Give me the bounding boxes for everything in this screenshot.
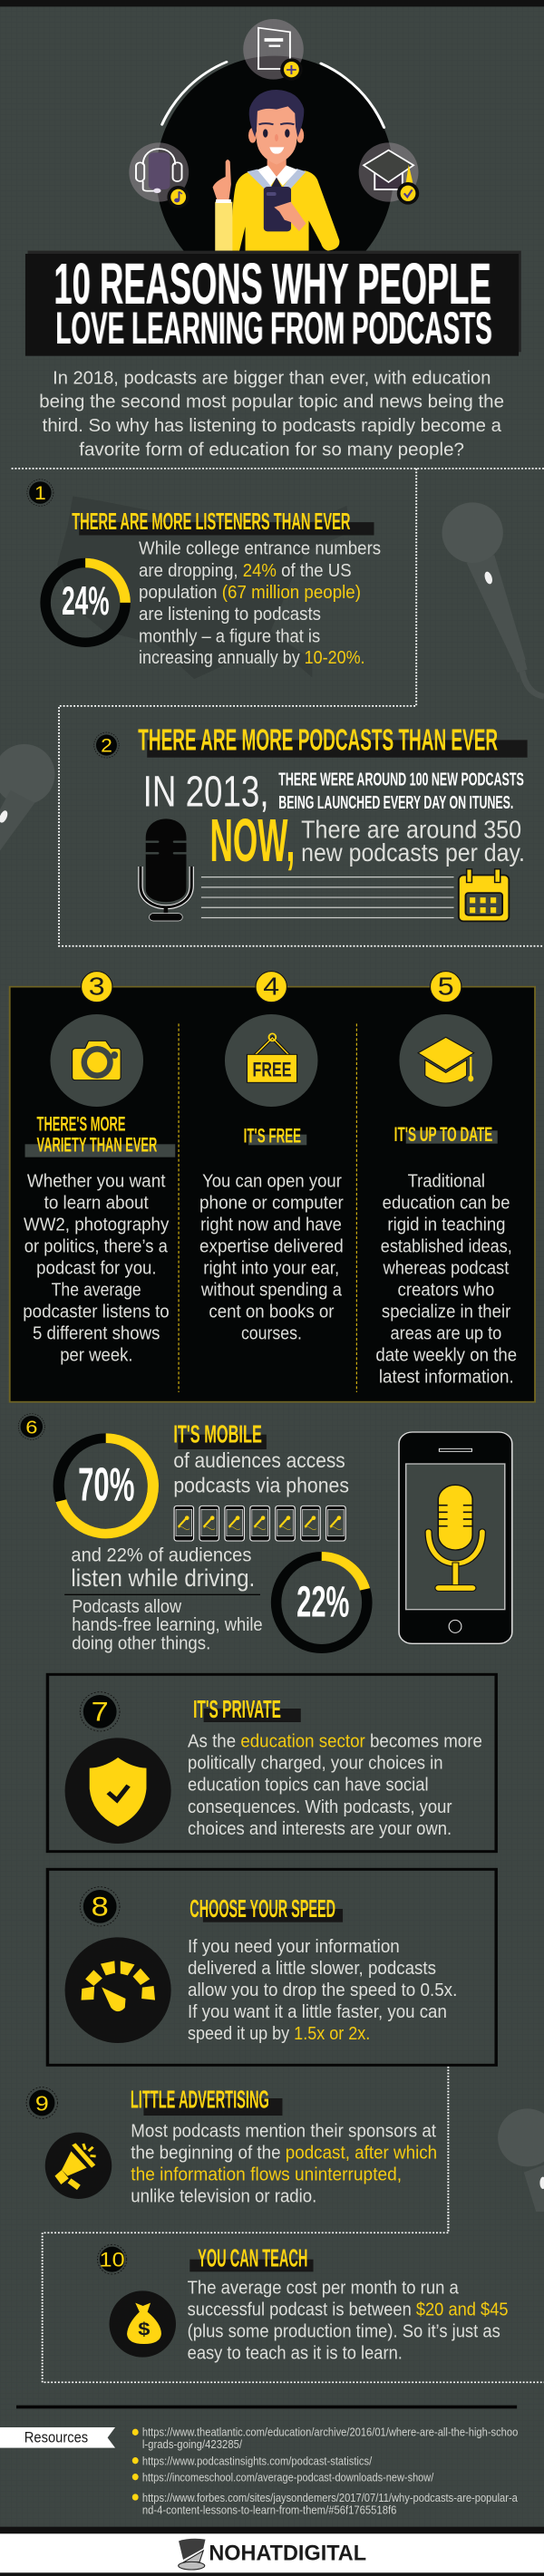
icon: money bag: $ (138, 2319, 151, 2339)
header section (0, 0, 544, 460)
column 5 (375, 972, 517, 1387)
text: driving stat: doing other things. (72, 1633, 210, 1653)
heading (72, 508, 374, 536)
panel: reason 8 (47, 1869, 496, 2065)
number 7: 7 (92, 1697, 109, 1727)
heading (193, 1696, 301, 1723)
number 6: 6 (25, 1417, 37, 1438)
body text: While college entrance numbers (139, 538, 381, 558)
icon: document (243, 19, 304, 81)
number 1 (27, 479, 53, 506)
intro text: favorite form of education for so many people? (79, 439, 464, 460)
body text: monthly – a figure that is (139, 626, 320, 646)
heading (173, 1421, 267, 1449)
body text: areas are up to (390, 1322, 501, 1343)
lines (201, 877, 454, 918)
body text: the beginning of the podcast, after which (131, 2142, 437, 2163)
hero illustration (129, 19, 419, 294)
body text: allow you to drop the speed to 0.5x. (188, 1979, 457, 2000)
icons: row of phones (174, 1506, 345, 1541)
number 3 (82, 972, 112, 1002)
body text: podcast for you. (36, 1257, 157, 1278)
text: driving stat: and 22% of audiences (71, 1544, 251, 1565)
body text: cent on books or (209, 1301, 335, 1322)
icon: free sign (225, 1014, 318, 1107)
body text: or politics, there’s a (24, 1235, 168, 1256)
title banner (25, 250, 521, 356)
donut chart 70% (59, 1438, 153, 1534)
intro text (39, 367, 504, 460)
stat now (210, 807, 525, 874)
text: phones stat (173, 1449, 349, 1497)
text: driving stat: Podcasts allow (72, 1596, 182, 1617)
body text: The average cost per month to run a (188, 2277, 459, 2298)
heading (131, 2087, 282, 2116)
resources ribbon (0, 2427, 115, 2448)
panel: reason 8: CHOOSE YOUR SPEED (189, 1895, 335, 1923)
body text: speed it up by 1.5x or 2x. (188, 2022, 370, 2044)
body text: expertise delivered (199, 1235, 344, 1256)
panel: reason 6 (18, 1414, 512, 1653)
resources list: https://www.podcastinsights.com/podcast-statistics/ (142, 2455, 372, 2467)
text: driving stat (64, 1544, 263, 1653)
panel: reason 2 (94, 723, 528, 921)
text: phones stat: podcasts via phones (173, 1475, 349, 1497)
body text (188, 2277, 509, 2363)
heading: IT'S FREE (244, 1126, 301, 1148)
body text (199, 1170, 344, 1343)
person (213, 90, 339, 251)
stat 2013: IN 2013, (143, 766, 269, 816)
body text: right into your ear, (203, 1257, 339, 1278)
heading (189, 2245, 314, 2272)
body text: easy to teach as it is to learn. (188, 2342, 403, 2363)
body text: the information flows uninterrupted, (131, 2164, 402, 2184)
phone mic (429, 1485, 482, 1591)
stat 2013 (143, 766, 524, 816)
body text (188, 1935, 457, 2044)
body text: choices and interests are your own. (188, 1817, 452, 1839)
white arcs (162, 62, 384, 128)
dotted path (12, 469, 544, 946)
icon: graduation cap (359, 142, 419, 205)
black circle (156, 56, 393, 294)
column dividers (179, 1023, 356, 1392)
body text: WW2, photography (24, 1214, 170, 1235)
body text: unlike television or radio. (131, 2185, 316, 2206)
number 1: 1 (34, 482, 46, 504)
resources ribbon: Resources (24, 2428, 88, 2445)
donut chart 22% (277, 1556, 367, 1649)
footer (0, 2527, 544, 2576)
panel: reasons 3 to 5 (10, 972, 535, 1402)
body text (139, 538, 381, 668)
body text (188, 1730, 482, 1839)
top bar (0, 0, 544, 6)
text: phones stat: of audiences access (173, 1449, 345, 1473)
body text: 5 different shows (33, 1322, 160, 1343)
icon: microphone (141, 818, 191, 921)
body text: You can open your (202, 1170, 342, 1191)
heading (189, 1895, 343, 1923)
resources list: nd-4-content-lessons-to-learn-from-them/#56f1765518f6 (142, 2503, 396, 2516)
number 7 (80, 1692, 120, 1731)
heading: THERE'S MORE (37, 1114, 126, 1136)
donut chart 24%: 24% (62, 577, 110, 624)
body text: right now and have (200, 1214, 342, 1235)
lower section (0, 2212, 544, 2576)
number 2: 2 (101, 735, 112, 757)
number 10: 10 (100, 2250, 125, 2271)
heading: IT'S PRIVATE (193, 1696, 281, 1723)
heading: IT'S MOBILE (173, 1421, 262, 1448)
icon: speedometer (65, 1937, 171, 2043)
resources list: https://incomeschool.com/average-podcast-downloads-new-show/ (142, 2472, 433, 2484)
sections 1 and 2 (0, 469, 544, 946)
body text: per week. (60, 1344, 133, 1365)
donut chart 70%: 70% (78, 1457, 134, 1511)
number 4: 4 (263, 973, 279, 1001)
heading (25, 1114, 175, 1157)
body text: rigid in teaching (387, 1214, 506, 1235)
number 4 (256, 972, 287, 1002)
body text: The average (52, 1279, 141, 1300)
resources list (132, 2426, 518, 2516)
number 9 (26, 2087, 58, 2118)
icon: mortarboard (399, 1014, 492, 1107)
body text: podcaster listens to (23, 1301, 170, 1322)
panel background (10, 987, 535, 1402)
logo: hat (179, 2539, 206, 2570)
body text: As the education sector becomes more (188, 1730, 482, 1751)
body text (375, 1170, 517, 1387)
panel: reason 9 (26, 2087, 437, 2206)
icon: free sign: FREE (253, 1060, 291, 1081)
panel: reason 10: YOU CAN TEACH (198, 2245, 307, 2272)
dotted path (446, 2067, 451, 2232)
body text: creators who (398, 1279, 494, 1300)
stat now: NOW, (210, 807, 295, 874)
US map silhouette (57, 496, 349, 679)
icon: camera (50, 1014, 143, 1107)
body text (131, 2120, 437, 2206)
body text: courses. (241, 1322, 302, 1343)
panel: reason 10 (98, 2244, 509, 2363)
heading: VARIETY THAN EVER (37, 1135, 157, 1157)
mic watermark right (442, 502, 544, 696)
body text: latest information. (379, 1366, 514, 1387)
body text: consequences. With podcasts, your (188, 1796, 452, 1817)
body text: Traditional (408, 1170, 485, 1191)
body text: are dropping, 24% of the US (139, 561, 352, 581)
icon: headset (129, 142, 189, 208)
body text: population (67 million people) (139, 583, 361, 603)
number 5: 5 (438, 973, 454, 1001)
mic watermark left (0, 744, 54, 851)
icon: money bag (110, 2290, 176, 2358)
body text: without spending a (200, 1279, 342, 1300)
body text: education can be (383, 1192, 510, 1213)
text: driving stat: listen while driving. (71, 1565, 255, 1593)
panel: reason 9: LITTLE ADVERTISING (131, 2087, 269, 2114)
number 8 (80, 1887, 120, 1926)
heading (394, 1124, 498, 1147)
number 8: 8 (92, 1892, 109, 1922)
body text (23, 1170, 170, 1365)
body text: specialize in their (382, 1301, 511, 1322)
panel: reason 7 (47, 1674, 496, 1852)
body text: are listening to podcasts (139, 605, 321, 625)
dotted path (43, 2212, 544, 2382)
body text: increasing annually by 10-20%. (139, 648, 365, 668)
number 9: 9 (35, 2092, 49, 2116)
panels: reasons 8 and 9 (26, 1869, 544, 2232)
body text: If you need your information (188, 1935, 400, 1957)
icon: calendar (459, 869, 509, 921)
body text: whereas podcast (383, 1257, 510, 1278)
logo: wordmark: NOHATDIGITAL (209, 2542, 366, 2565)
box outline (47, 1674, 496, 1852)
body text: education topics can have social (188, 1774, 429, 1795)
body text: successful podcast is between $20 and $45 (188, 2299, 509, 2319)
text: driving stat: hands-free learning, while (72, 1614, 263, 1635)
body text: Most podcasts mention their sponsors at (131, 2120, 437, 2141)
resources list: l-grads-going/423285/ (142, 2438, 242, 2451)
icon: shield (65, 1738, 171, 1844)
heading (244, 1126, 306, 1148)
column 4 (199, 972, 344, 1343)
number 6 (18, 1414, 44, 1439)
mic watermark (498, 2108, 544, 2212)
body text: phone or computer (199, 1192, 344, 1213)
panel: reason 1 (27, 479, 381, 679)
number 3: 3 (89, 973, 105, 1001)
body text: Whether you want (27, 1170, 166, 1191)
number 2 (94, 732, 119, 758)
icon: megaphone (45, 2133, 112, 2199)
body text: delivered a little slower, podcasts (188, 1957, 436, 1979)
donut chart 22%: 22% (296, 1578, 349, 1626)
body text: politically charged, your choices in (188, 1752, 443, 1773)
donut chart 24% (45, 563, 125, 643)
body text: If you want it a little faster, you can (188, 2000, 447, 2022)
body text: to learn about (44, 1192, 149, 1213)
column 3 (23, 972, 175, 1365)
number 5 (430, 972, 461, 1002)
number 10 (98, 2244, 127, 2274)
icon: large phone (399, 1432, 512, 1643)
divider (16, 2406, 517, 2408)
